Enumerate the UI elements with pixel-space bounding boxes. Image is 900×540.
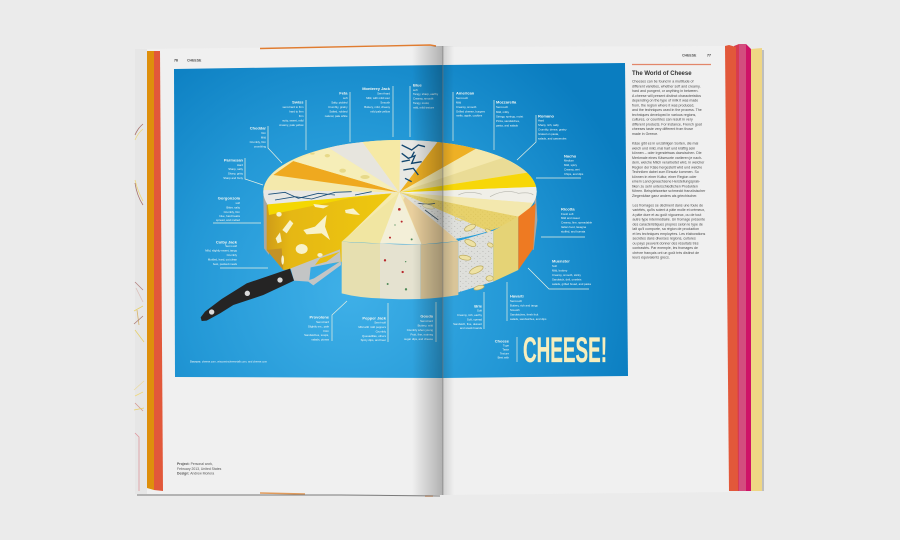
label: Colby Jack: Crumbly: [227, 253, 238, 257]
right book page: [444, 46, 730, 495]
label: Havarti: Havarti: [510, 294, 524, 298]
label: Ricotta: Creamy, fine, spreadable: [561, 220, 592, 224]
article text: German: Ziegenkäse ganz anders als griechischer.: [632, 194, 697, 198]
label: Monterey Jack: Mild, with mild sour: [366, 96, 390, 100]
label: Provolone: Sandwiches, soups,: [304, 333, 329, 337]
blue infographic panel: [174, 63, 628, 378]
left page ribbon edges: [137, 45, 440, 496]
label: Cheese: Texture: [500, 352, 509, 356]
label: Blue: mild, mild texture: [413, 106, 435, 110]
right header: [682, 54, 711, 58]
article text: German: Techniken dabei zum Einsatz kommen. So: [632, 170, 699, 174]
label: American: Creamy, smooth: [456, 105, 477, 109]
article text: English: made in Greece.: [632, 132, 658, 136]
knife blade: [291, 249, 341, 285]
label: Cheddar: firm: [261, 131, 267, 135]
article text: German: einem Land gewachsene Herstellungsprak-: [632, 180, 701, 184]
label: Swiss: hard to firm: [289, 110, 304, 114]
label: Gouda: Semi-hard: [420, 319, 433, 323]
article text: German: können in einer Kultur, einer Region oder: [632, 175, 697, 179]
label: Brie: and snack boards: [460, 326, 483, 330]
article text: German: führen. Beispielsweise schmeckt französischer: [632, 189, 706, 193]
label: Brie: [453, 292, 484, 330]
knife: [201, 249, 341, 321]
front wedge top: [342, 192, 458, 244]
label: Blue: Tangy, sharp, earthy: [413, 92, 439, 96]
article text: English: and the techniques used in the process. The: [632, 108, 702, 112]
article text: German: können – oder irgendetwas dazwischen. Die: [632, 151, 702, 155]
label: Cheese: Taste: [502, 348, 509, 352]
cheese rind slivers: [263, 188, 537, 255]
sources note: Sources: cheese.com, wisconsincheesetalk.com, and cheese.com: [190, 360, 267, 364]
right header: 77: [707, 54, 711, 58]
label: Mozzarella: [494, 100, 523, 150]
left header: CHEESE: [187, 58, 202, 62]
article text: French: Les fromages se déclinent dans une foule de: [632, 203, 703, 207]
label: Provolone: Slightly sm., pale: [308, 324, 329, 328]
label: Havarti: Buttery, rich and tangy: [510, 304, 538, 308]
article text: English: techniques developed in various regions,: [632, 113, 696, 117]
book gutter shadow: [412, 46, 454, 495]
label: American: Mild: [456, 100, 462, 104]
article text: English: depending on the type of milk it was made: [632, 99, 698, 103]
label: Romano: Sharp, rich, salty: [538, 123, 559, 127]
top face slices: [263, 140, 537, 243]
right cut face: white cheese with oval holes: [458, 203, 536, 292]
left book page: [134, 46, 444, 495]
label: Cheddar: crumbling: [254, 144, 266, 148]
article text: German: weich und mild, mal hart und kräftig sein: [632, 146, 695, 150]
label: American: [453, 90, 486, 141]
label: Cheese: Type: [503, 344, 509, 348]
left cut face: yellow veined cheese: [267, 193, 392, 270]
label: Muenster: Soft: [552, 264, 557, 268]
label: Monterey Jack: Buttery, mild, cheesy: [364, 105, 391, 109]
label: Gouda: Gouda: [420, 314, 434, 318]
label: Mozzarella: Mozzarella: [496, 100, 517, 104]
label: Parmesan: Sharp, salty: [228, 167, 244, 171]
label: Nacho: Nacho: [564, 154, 577, 158]
article text: German: Käse gibt es in unzähligen Sorten, die mal: [632, 142, 698, 146]
label: Nacho: Creamy, wet: [564, 168, 580, 172]
label: Provolone: salads, pizzas: [311, 338, 330, 342]
label: Brie: Sandwich, fine, dessert: [453, 322, 482, 326]
label: Gorgonzola: spread, and melted: [216, 218, 240, 222]
label: American: melts, apple, cookies: [456, 114, 483, 118]
label: Brie: Soft: [477, 308, 482, 312]
label: Gorgonzola: blue, hard beaks: [219, 214, 241, 218]
label: Blue: Blue: [413, 82, 422, 88]
label: Pepper Jack: Semi-soft: [374, 320, 386, 324]
label: Cheese: Cheese: [495, 338, 510, 344]
right header: CHEESE: [682, 54, 697, 58]
label: Feta: Salty, pickled: [331, 100, 348, 104]
label: Romano: Romano: [538, 114, 555, 118]
article rule: [632, 64, 711, 66]
article text: French: secrètes dans diverses régions, cultures: [632, 237, 696, 241]
label: Brie: Creamy, rich, earthy: [457, 313, 483, 317]
label: Feta: [325, 90, 350, 142]
label: Swiss: creamy, pale yellow: [279, 123, 304, 127]
label: Monterey Jack: [362, 86, 393, 137]
label: Swiss: nutty, sweet, mild: [282, 118, 304, 122]
front wedge side: [342, 241, 458, 299]
left header: 76: [174, 58, 178, 62]
label: Provolone: Firm: [323, 329, 330, 333]
label: Gorgonzola: Gorgonzola: [218, 196, 241, 200]
label: Monterey Jack: Semi-hard: [377, 92, 390, 96]
label: Pepper Jack: Pepper Jack: [362, 316, 387, 320]
label: Swiss: Swiss: [292, 100, 304, 104]
project credit: February 2013, United States: [177, 467, 222, 471]
article text: French: à pâte dure et au goût vigoureux, ou de tout: [632, 213, 701, 217]
label: Provolone: Semi-hard: [316, 320, 329, 324]
label: Nacho: Medium: [564, 158, 575, 162]
label: Gouda: [404, 302, 436, 342]
label: Blue: soft: [413, 88, 418, 92]
label: Gorgonzola: Bitter, salty: [226, 206, 241, 210]
label: Brie: Brie: [474, 304, 483, 308]
label: Provolone: [304, 301, 347, 342]
article text: English: cultures, or countries can result in very: [632, 118, 693, 122]
article text: French: des caractéristiques propres selon le type de: [632, 222, 703, 226]
label: Pepper Jack: Spicy dips, and beer: [361, 338, 386, 342]
label: Romano: [517, 114, 567, 160]
article text: English: Cheeses can be found in a multitude of: [632, 80, 694, 84]
label: Feta: Salted, rubbed: [329, 110, 348, 114]
label: Monterey Jack: Smooth: [380, 100, 390, 104]
article text: French: contrastés. Par exemple, les fromages de: [632, 246, 698, 250]
label: Nacho: Mild, spicy: [564, 163, 578, 167]
open book spread: [134, 44, 764, 497]
label: American: Grilled cheese, burgers: [456, 110, 486, 114]
label: Cheddar: [250, 126, 282, 163]
label: Ricotta: Italian food, lasagna: [561, 225, 586, 229]
label: Colby Jack: Colby Jack: [216, 240, 238, 244]
label: Havarti: Sandwiches, fresh fruit: [510, 312, 539, 316]
article text: German: dem, welche Milch verarbeitet wird, in welcher: [632, 161, 705, 165]
cheese wheel: [201, 135, 555, 321]
label: Gorgonzola: soft: [235, 201, 240, 205]
label: Ricotta: Fresh soft: [561, 212, 574, 216]
label: Provolone: Provolone: [309, 314, 330, 320]
label: Romano: Grated on pasta,: [538, 132, 559, 136]
label: Cheddar: Crumbly, firm: [250, 140, 267, 144]
label: Parmesan: Sharp and fruity: [223, 176, 244, 180]
article text: English: hard and pungent, or anything in between.: [632, 89, 698, 93]
article text: German: Region der Käse hergestellt wird und welche: [632, 165, 702, 169]
label: Feta: Crumbly, grainy: [328, 105, 348, 109]
label: Muenster: Mild, buttery: [552, 268, 568, 272]
label: Romano: salads, and casseroles: [538, 136, 567, 140]
label: Monterey Jack: mild pale yellow: [370, 110, 391, 114]
label: Muenster: Muenster: [552, 258, 570, 264]
left page edge marks: [134, 124, 144, 491]
article text: French: leurs équivalents grecs.: [632, 256, 670, 260]
article text: French: chèvre français ont un goût très distinct de: [632, 251, 699, 255]
label: Romano: Crumbly, dense, grainy: [538, 128, 567, 132]
label: Gouda: Fruit, fine, nutmeg: [410, 332, 433, 336]
label: Colby Jack: best, packed meals: [213, 262, 238, 266]
label: Cheddar: Mild: [261, 136, 266, 140]
label: Mozzarella: pasta, and salads: [496, 124, 519, 128]
right fore-edge coloured pages: [725, 44, 764, 491]
label: Parmesan: [223, 158, 263, 185]
label: Muenster: Sandwich, deli, omelets: [552, 278, 582, 282]
label: Colby Jack: [205, 240, 268, 268]
label: Mozzarella: Pizza, sandwiches,: [496, 119, 520, 123]
left header: [174, 58, 202, 62]
label: Havarti: salads, sandwiches, and dips: [510, 317, 547, 321]
label: Havarti: Semi-soft: [510, 299, 522, 303]
label: American: Semi-soft: [456, 96, 468, 100]
label: Colby Jack: Semi-soft: [225, 244, 237, 248]
label: Mozzarella: Stringy, springy, moist: [496, 114, 523, 118]
big title: CHEESE!: CHEESE!: [523, 331, 607, 370]
label: Parmesan: Parmesan: [224, 158, 244, 162]
label: Brie: Soft, spread: [467, 318, 482, 322]
label: Pepper Jack: [358, 303, 388, 342]
article text: French: autre type intermédiaire. Un fromage présente: [632, 218, 705, 222]
label: Cheddar: Cheddar: [250, 126, 266, 130]
label: Swiss: [279, 100, 306, 150]
label: Mozzarella: Semi-soft: [496, 105, 508, 109]
label: Blue: Creamy, smooth: [413, 96, 434, 100]
article text: French: variétés, qu'ils soient à pâte molle et crémeux,: [632, 208, 705, 212]
label: Pepper Jack: Crumbly: [376, 330, 387, 334]
label: American: American: [456, 90, 475, 96]
label: Parmesan: Hard: [237, 163, 243, 167]
label: Monterey Jack: Monterey Jack: [362, 86, 391, 91]
label: Gouda: Crumbly when young: [407, 328, 433, 332]
article title: The World of Cheese: [632, 71, 692, 77]
top face details: [268, 145, 533, 234]
label: Havarti: Smooth: [510, 308, 520, 312]
article text: English: different varieties, whether soft and creamy,: [632, 84, 700, 88]
label: Nacho: [536, 154, 584, 178]
label: Feta: Feta: [339, 90, 348, 96]
article text: French: ou pays peuvent donner des résultats très: [632, 241, 699, 245]
label: Blue: [410, 82, 439, 137]
article text: French: lait qu'il comporte, sa région de production: [632, 227, 699, 231]
label: Feta: soft: [343, 96, 348, 100]
label: Gouda: sugar dips, and cheese: [404, 337, 433, 341]
label: Gorgonzola: Crumbly, firm: [224, 210, 241, 214]
knife handle: [201, 269, 294, 321]
label: Mozzarella: Mild, milky: [496, 110, 510, 114]
label: Blue: Tangy, moist,: [413, 101, 429, 105]
label: Ricotta: [541, 206, 592, 237]
label: Colby Jack: Mottled, hard, cut clean: [208, 258, 237, 262]
label: Muenster: salads, grilled bread, and pasta: [552, 282, 591, 286]
label: Muenster: Creamy, smooth, sticky: [552, 273, 581, 277]
label: Swiss: semi-hard to firm: [283, 105, 304, 109]
label: Cheese: Best with: [498, 356, 509, 360]
label: Pepper Jack: Quesadillas, others: [362, 334, 387, 338]
label: Ricotta: Mild and sweet: [561, 216, 580, 220]
label: Colby Jack: Mild, slightly sweet, tangy: [205, 248, 238, 252]
label: Swiss: firm: [299, 114, 304, 118]
label: Gorgonzola: [213, 196, 261, 223]
project credit: Design: Andrew Moriera: [177, 472, 214, 476]
article text: English: A cheese will present distinct characteristics: [632, 94, 701, 98]
label: Havarti: [507, 282, 547, 321]
label: Gouda: Buttery, mild: [418, 324, 433, 328]
label: Ricotta: Ricotta: [561, 206, 575, 212]
label: Nacho: Chips, and dips: [564, 172, 584, 176]
article text: German: tiken zu sehr unterschiedlichen Produkten: [632, 184, 698, 188]
article text: French: et les techniques employées. Les élaborations: [632, 232, 705, 236]
label: Pepper Jack: Mild with mild peppers: [358, 325, 387, 329]
label: Parmesan: Sharp, gritty: [228, 172, 244, 176]
project credit: Project: Personal work,: [177, 462, 213, 466]
knife rivets: [209, 277, 283, 315]
article text: German: Merkmale eines Käsesorte variieren je nach-: [632, 156, 703, 160]
label: Cheese: [495, 337, 517, 362]
article text: English: cheeses taste very different from those: [632, 127, 693, 131]
label: Muenster: [528, 258, 591, 289]
label: Feta: natural, pale white: [325, 114, 348, 118]
label: Romano: Hard: [538, 118, 545, 122]
article text: English: different products. For instance, French goat: [632, 122, 702, 126]
project credit: [177, 462, 222, 476]
label: Ricotta: stuffed, and burrata: [561, 230, 586, 234]
article text: English: from, the region where it was produced,: [632, 103, 694, 107]
